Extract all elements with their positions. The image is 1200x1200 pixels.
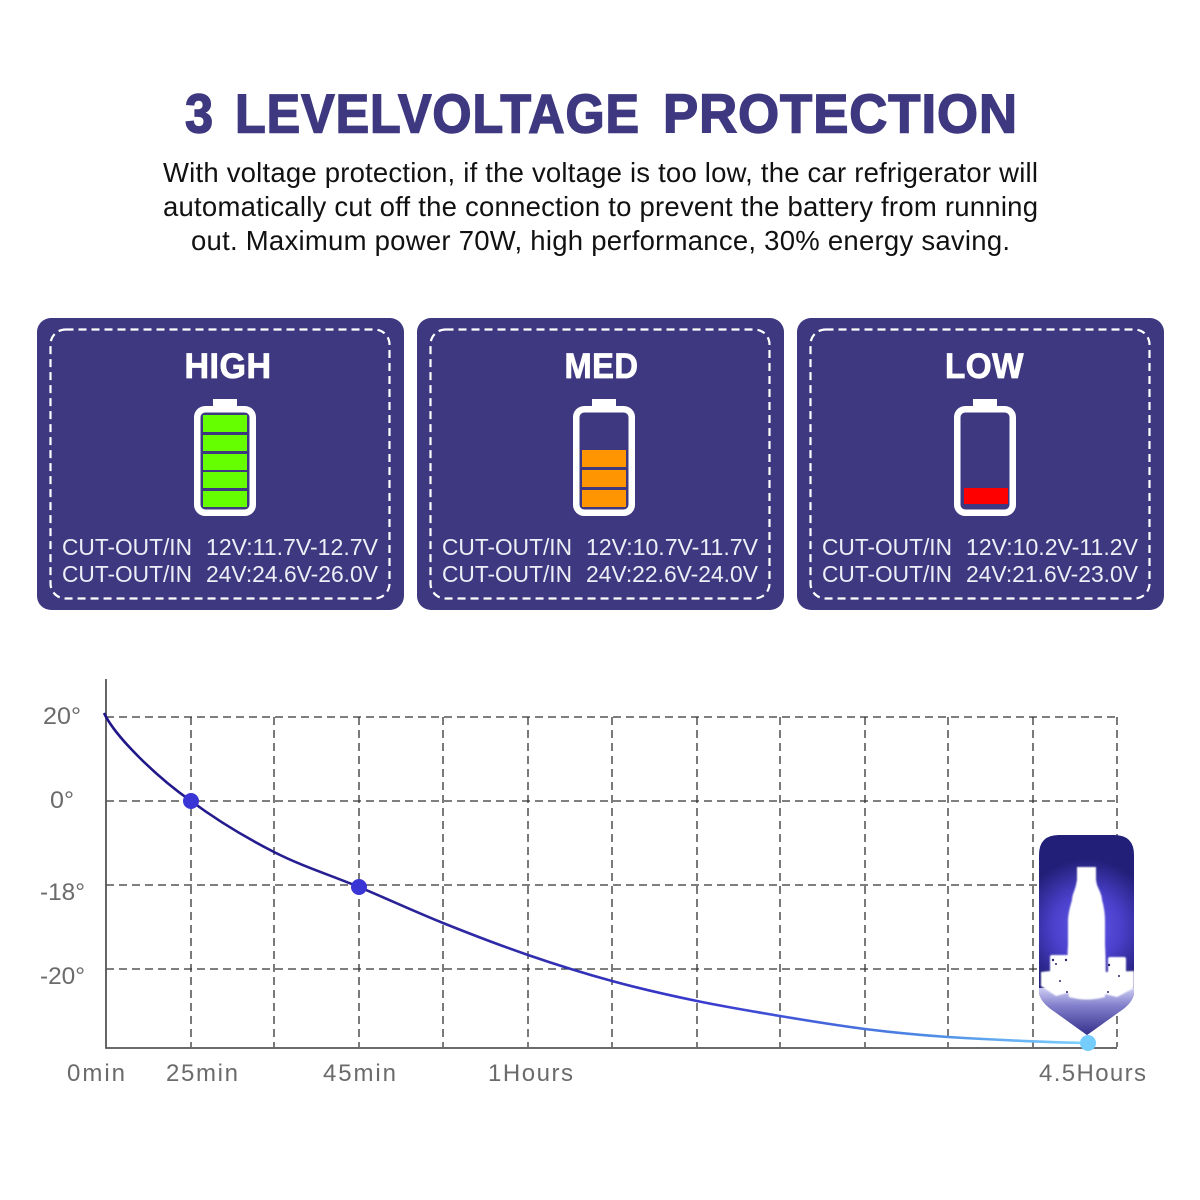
panel: high xyxy=(37,318,404,610)
data point: 4.5 hours xyxy=(1080,1035,1096,1051)
voltage values: low: CUT-OUT/IN xyxy=(822,561,952,587)
icon: battery low xyxy=(957,399,1013,513)
y axis labels: 20° xyxy=(43,703,81,730)
voltage values: high: 24V:24.6V-26.0V xyxy=(206,561,378,587)
intro text: out. Maximum power 70W, high performance, 30% energy saving. xyxy=(191,225,1010,256)
voltage values: high: CUT-OUT/IN xyxy=(62,534,192,560)
cooling line chart xyxy=(40,679,1146,1087)
heading: med: MED xyxy=(564,347,638,386)
x axis labels: 25min xyxy=(166,1060,238,1087)
x axis labels: 45min xyxy=(323,1060,396,1087)
voltage values: high xyxy=(62,534,378,587)
title: LEVELVOLTAGE xyxy=(235,82,640,144)
y axis labels: -18° xyxy=(40,879,85,906)
panel: low xyxy=(797,318,1164,610)
heading: low: LOW xyxy=(945,347,1024,386)
intro text: With voltage protection, if the voltage is too low, the car refrigerator will xyxy=(163,157,1038,188)
heading: high: HIGH xyxy=(184,347,272,386)
temperature curve xyxy=(104,713,1088,1043)
y axis labels: -20° xyxy=(40,963,85,990)
voltage values: low: 24V:21.6V-23.0V xyxy=(966,561,1138,587)
voltage values: med: CUT-OUT/IN xyxy=(442,534,572,560)
x axis labels: 4.5Hours xyxy=(1039,1060,1146,1087)
icon: battery full xyxy=(197,399,253,513)
panel: med xyxy=(417,318,784,610)
voltage values: high: CUT-OUT/IN xyxy=(62,561,192,587)
x axis labels: 1Hours xyxy=(488,1060,573,1087)
voltage values: high: 12V:11.7V-12.7V xyxy=(206,534,378,560)
data point: 45min xyxy=(351,879,367,895)
voltage values: low: CUT-OUT/IN xyxy=(822,534,952,560)
x axis labels xyxy=(67,1060,1146,1087)
voltage values: low xyxy=(822,534,1138,587)
voltage values: low: 12V:10.2V-11.2V xyxy=(966,534,1138,560)
data point: 25min xyxy=(183,793,199,809)
x axis labels: 0min xyxy=(67,1060,125,1087)
icon: battery medium xyxy=(576,399,632,513)
y axis labels xyxy=(40,703,85,990)
intro text xyxy=(163,157,1038,256)
title xyxy=(185,82,1018,144)
voltage values: med: CUT-OUT/IN xyxy=(442,561,572,587)
icon: frozen bottle marker xyxy=(1039,835,1134,1035)
title: PROTECTION xyxy=(663,82,1018,144)
voltage values: med: 24V:22.6V-24.0V xyxy=(586,561,758,587)
voltage values: med xyxy=(442,534,758,587)
intro text: automatically cut off the connection to prevent the battery from running xyxy=(163,191,1038,222)
title: 3 xyxy=(185,82,214,144)
voltage values: med: 12V:10.7V-11.7V xyxy=(586,534,758,560)
y axis labels: 0° xyxy=(50,787,74,814)
